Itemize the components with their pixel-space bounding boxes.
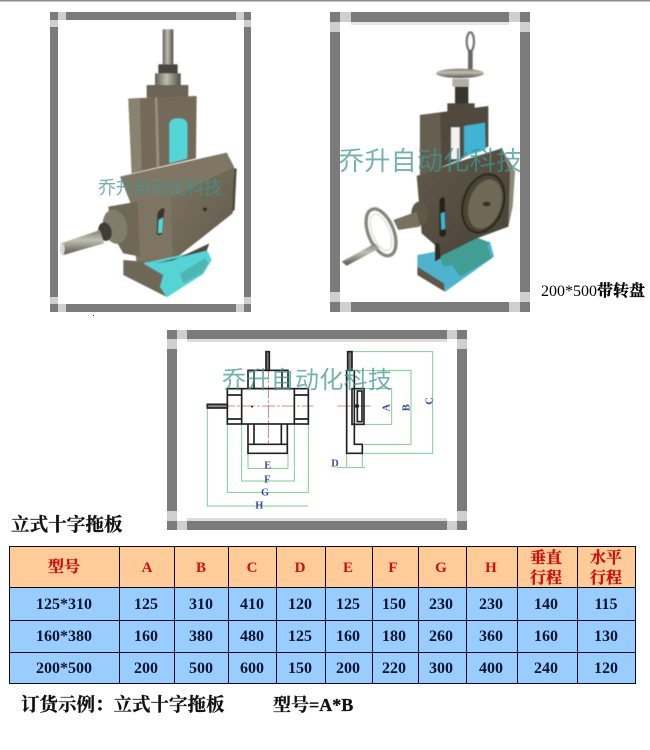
dimension letters: E [264, 461, 271, 472]
table row 200*500: 600 [240, 660, 264, 677]
machine photo: plain slide [60, 29, 237, 297]
table row 160*380: 160 [534, 628, 558, 645]
table header row [48, 548, 622, 587]
machine photo: rotary slide [342, 32, 515, 292]
table header row: A [142, 560, 153, 576]
table row 160*380: 160 [134, 628, 158, 645]
table row 160*380: 380 [189, 628, 213, 645]
table grid [10, 546, 636, 684]
side view [347, 352, 364, 453]
table row 200*500: 150 [288, 660, 312, 677]
table header row: 行程 [530, 569, 562, 587]
table header row: H [485, 560, 497, 576]
table row 125*310: 125 [134, 596, 158, 613]
watermark drawing: 乔升自动化科技 [222, 367, 392, 394]
heading: 立式十字拖板 [11, 515, 123, 536]
table row 160*380: 130 [594, 628, 618, 645]
table row 160*380 [36, 628, 618, 645]
drawing frame [167, 330, 467, 530]
table row 125*310: 310 [189, 596, 213, 613]
table header row: F [388, 560, 398, 576]
table row 200*500: 200 [134, 660, 158, 677]
watermark right photo: 乔升自动化科技 [338, 146, 522, 176]
table row 200*500 [36, 660, 618, 677]
table header row: 水平 [590, 549, 622, 567]
table row 200*500: 220 [382, 660, 406, 677]
table row 160*380: 160*380 [36, 628, 92, 645]
table header row: 垂直 [530, 548, 562, 567]
table row 160*380: 360 [479, 628, 503, 645]
table row 160*380: 125 [288, 628, 312, 645]
technical drawing: C [425, 397, 436, 405]
watermark left photo: 乔升自动化科技 [98, 178, 222, 198]
table row 200*500: 300 [429, 660, 453, 677]
technical drawing: A [382, 403, 393, 411]
table row 200*500: 200*500 [36, 660, 92, 677]
table row 125*310: 120 [288, 596, 312, 613]
technical drawing: F [264, 474, 270, 485]
center lines [222, 365, 371, 445]
table header row: B [196, 560, 206, 576]
table body background [10, 588, 636, 684]
panel: dimension drawing [167, 330, 467, 530]
caption: 200*500 with rotary plate: 200*500带转盘 [541, 281, 645, 300]
table header row: G [435, 560, 447, 576]
technical drawing: G [261, 487, 269, 498]
order example [21, 694, 353, 716]
technical drawing: D [331, 459, 339, 470]
table row 160*380: 180 [382, 628, 406, 645]
table row 200*500: 400 [479, 660, 503, 677]
top edge line [0, 0, 650, 2]
table row 125*310: 230 [479, 596, 503, 613]
table row 160*380: 260 [429, 628, 453, 645]
small dot below photo [93, 315, 94, 316]
table row 125*310: 410 [240, 596, 264, 613]
table header background [10, 546, 636, 588]
photo frame left [50, 12, 251, 312]
photo frame right [330, 12, 530, 312]
table header row: E [343, 560, 353, 576]
table row 125*310 [36, 596, 618, 613]
photo panel: cross slide [50, 12, 251, 316]
technical drawing: B [401, 404, 412, 411]
table row 125*310: 230 [429, 596, 453, 613]
technical drawing: H [255, 501, 263, 512]
table header row: 型号 [48, 558, 80, 576]
dimension lines [207, 352, 433, 506]
spec table [10, 546, 636, 684]
table row 200*500: 500 [189, 660, 213, 677]
table row 200*500: 120 [594, 660, 618, 677]
order example: 订货示例：立式十字拖板 [21, 694, 225, 716]
order example: 型号=A*B [273, 695, 353, 715]
front view [207, 352, 308, 453]
table row 200*500: 200 [336, 660, 360, 677]
table header row: 行程 [590, 569, 622, 587]
table row 160*380: 160 [336, 628, 360, 645]
table row 125*310: 150 [382, 596, 406, 613]
table row 125*310: 140 [534, 596, 558, 613]
table row 125*310: 125*310 [36, 596, 92, 613]
technical drawing [207, 352, 436, 512]
table row 125*310: 115 [594, 596, 618, 613]
photo panel: cross slide with rotary plate [330, 12, 530, 312]
table row 200*500: 240 [534, 660, 558, 677]
table header row: D [295, 560, 306, 576]
table header row: C [247, 560, 257, 576]
table row 125*310: 125 [336, 596, 360, 613]
table row 160*380: 480 [240, 628, 264, 645]
